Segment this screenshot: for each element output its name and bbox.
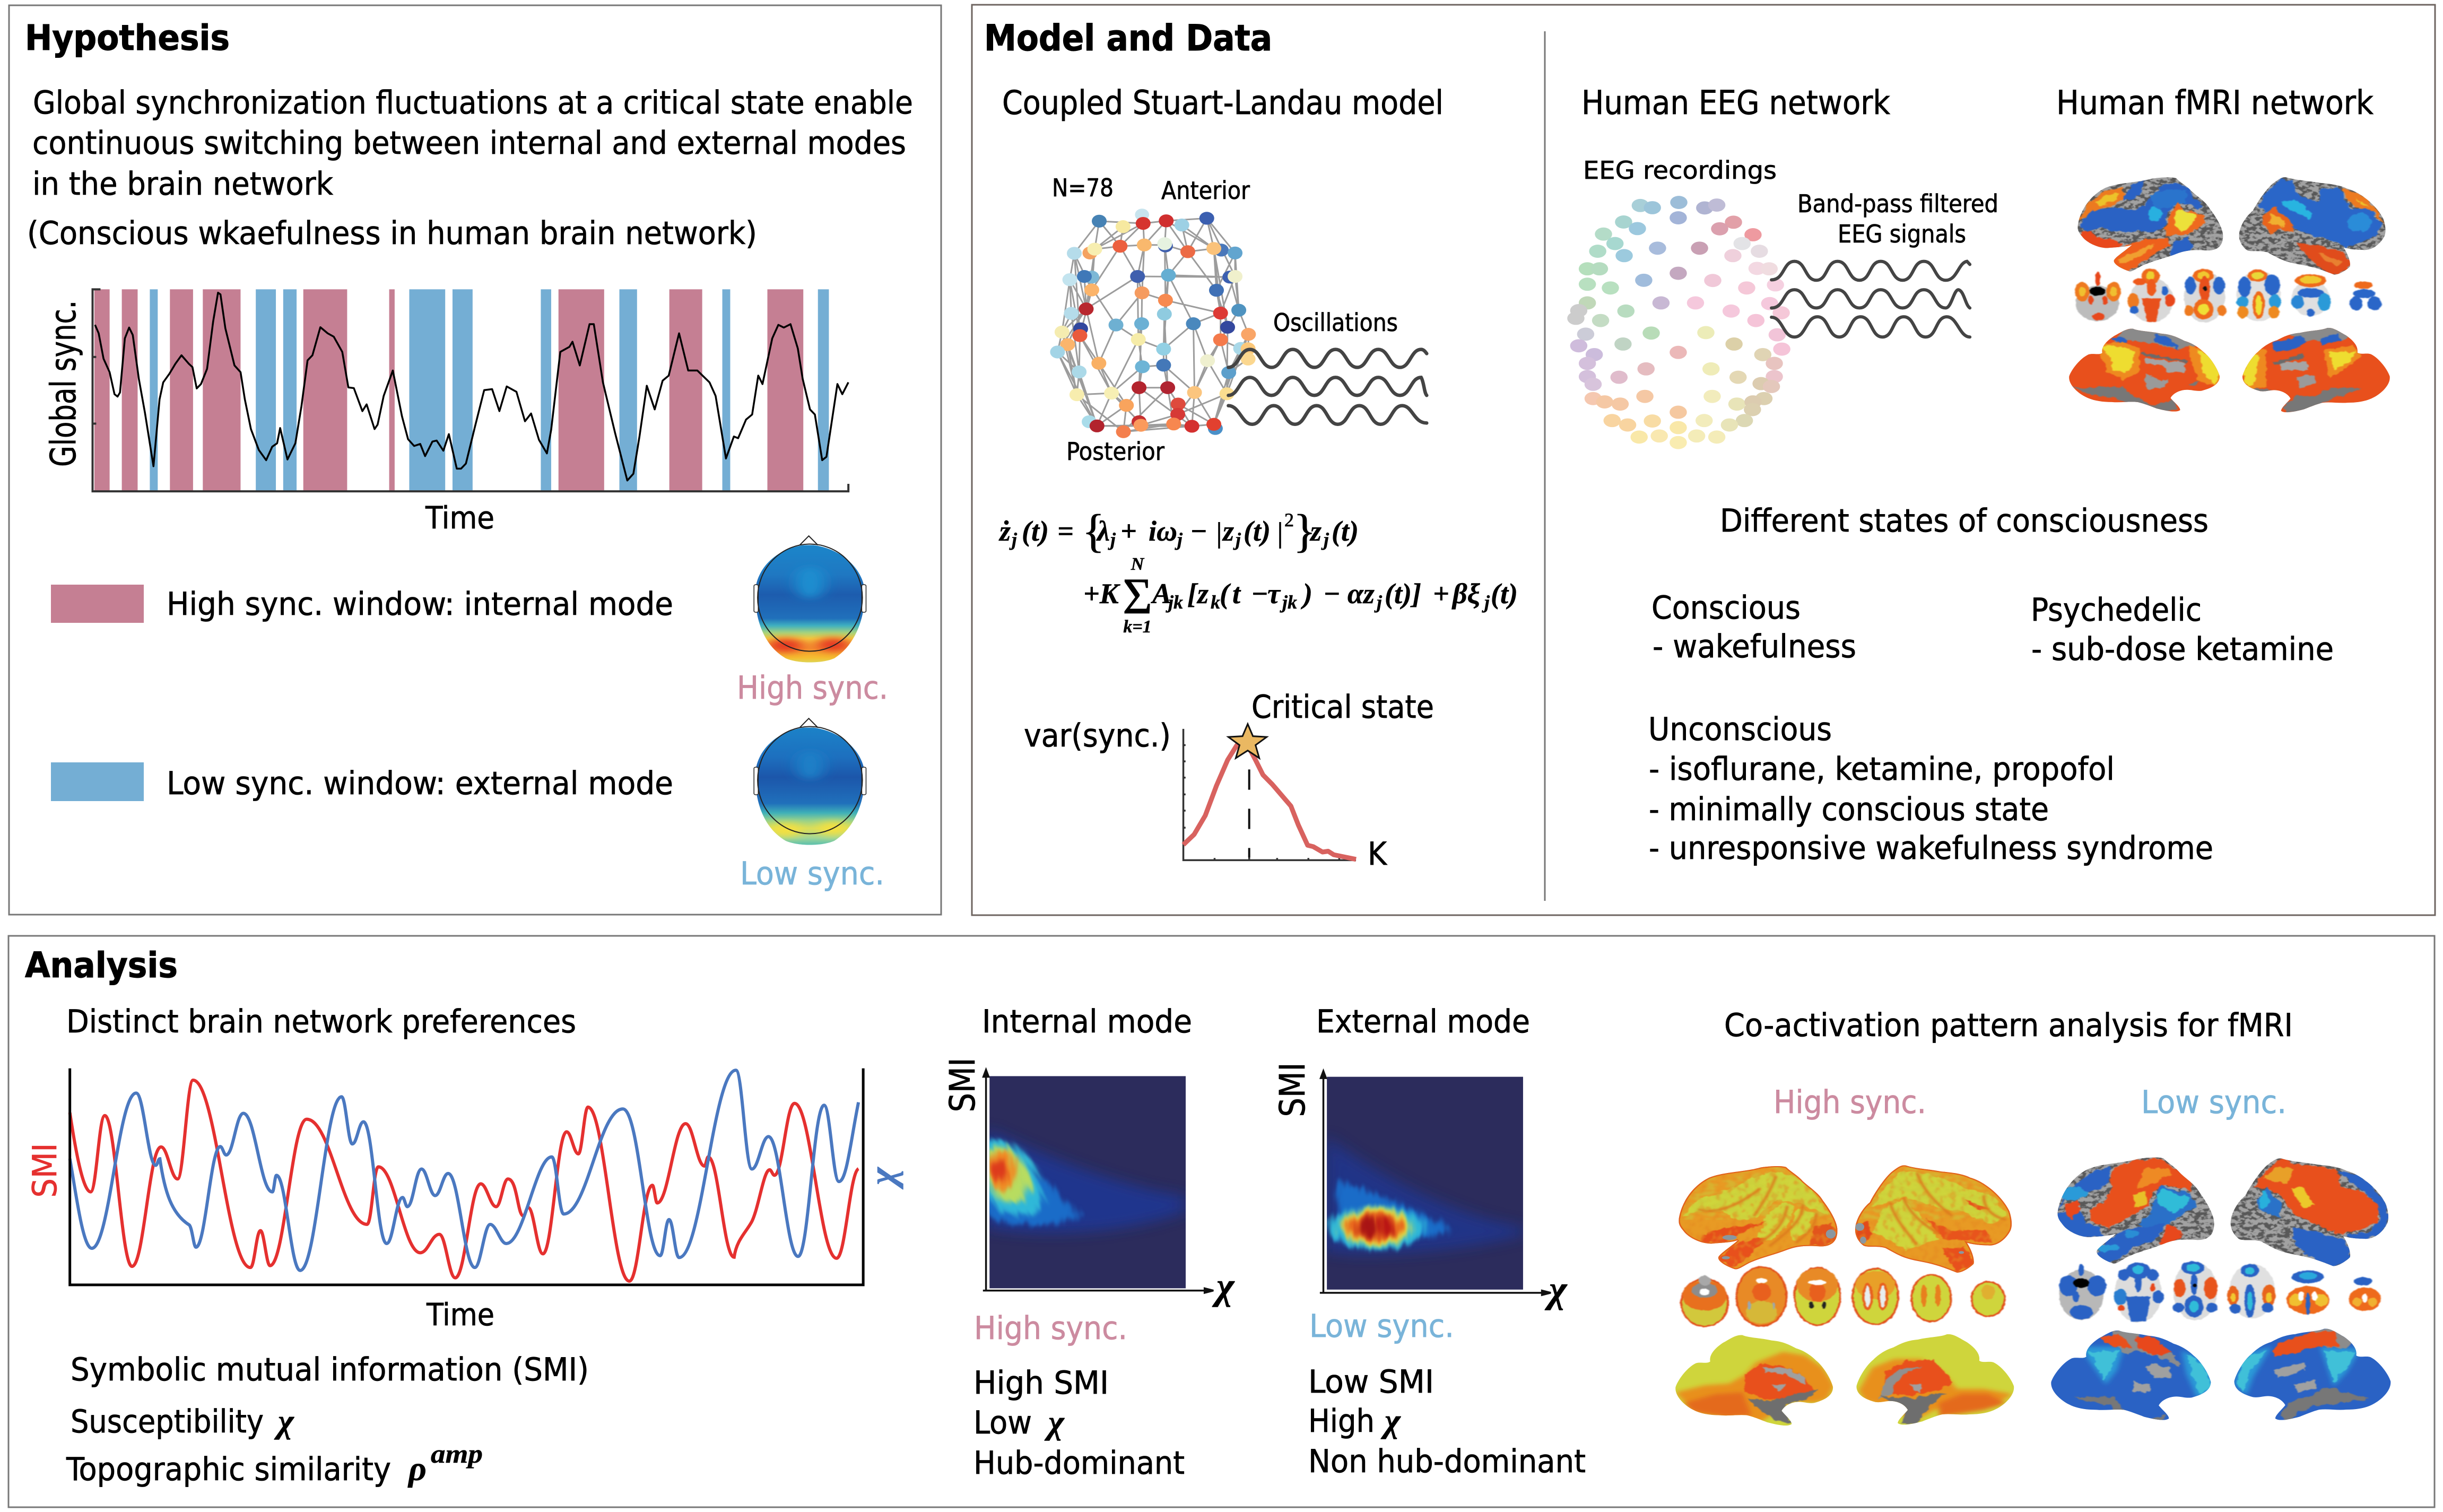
axis label: chi: χ [1212, 1265, 1235, 1307]
equation: Stuart-Landau model: z [1309, 515, 1322, 547]
label: Low sync.: Low sync. [740, 855, 884, 892]
heading: Co-activation pattern analysis for fMRI: Co-activation pattern analysis for fMRI [1724, 1007, 2293, 1044]
equation: Stuart-Landau model: (t) [1244, 515, 1271, 547]
chart: variance of synchrony vs coupling [1024, 689, 1434, 873]
brain: left medial [2048, 1327, 2218, 1426]
icon: EEG topography, high sync [749, 536, 871, 664]
equation: Stuart-Landau model: } [1293, 506, 1316, 557]
heading: External mode: External mode [1316, 1003, 1530, 1040]
axis label: SMI: SMI [25, 1143, 64, 1198]
equation: Stuart-Landau model: − [1190, 515, 1207, 547]
label: Band-pass filtered EEG signals: EEG signals [1838, 220, 1966, 248]
text block: internal mode properties: χ [1044, 1403, 1065, 1441]
heading: Coupled Stuart-Landau model: Coupled Stuart-Landau model [1002, 83, 1444, 122]
text block: unconscious states: - minimally conscious state [1649, 791, 2049, 828]
brain: left lateral [1675, 1163, 1841, 1273]
text block: external mode properties [1308, 1363, 1586, 1480]
label: Low sync. CAP: Low sync. [2141, 1084, 2286, 1121]
axis label: chi: χ [861, 1167, 903, 1190]
brain: axial slices [2075, 268, 2381, 323]
label: Critical state: Critical state [1251, 689, 1434, 726]
text block: unconscious states: - unresponsive wakefulness syndrome [1649, 830, 2213, 867]
text block: conscious states: Conscious [1651, 589, 1801, 627]
waves: band-pass filtered EEG [1771, 262, 1970, 337]
text block: metric definitions [66, 1351, 589, 1488]
equation: Stuart-Landau model: 2 [1284, 509, 1294, 531]
equation: Stuart-Landau model: j [1374, 592, 1383, 613]
equation: Stuart-Landau model: j [1233, 529, 1241, 550]
axis label: Time: Time [425, 500, 494, 536]
equation: Stuart-Landau model: iω [1149, 515, 1177, 547]
text block: unconscious states: Unconscious [1648, 711, 1832, 748]
text block: conscious states: - wakefulness [1653, 628, 1856, 665]
text block: metric definitions: χ [274, 1402, 294, 1440]
brain: axial slices [1681, 1267, 2005, 1326]
equation: Stuart-Landau model: k=1 [1123, 617, 1152, 637]
text block: internal mode properties: Hub-dominant [973, 1445, 1185, 1482]
text block: hypothesis statement: Global synchronization fluctuations at a critical state enable [33, 84, 913, 121]
equation: Stuart-Landau model: jk [1280, 592, 1297, 613]
legend: high sync window: High sync. window: internal mode [167, 586, 673, 623]
text block: conscious states [1651, 589, 1856, 665]
heading: Human fMRI network: Human fMRI network [2056, 83, 2374, 122]
equation: Stuart-Landau model: +K [1083, 578, 1121, 610]
equation: Stuart-Landau model: αz [1347, 578, 1375, 610]
text block: external mode properties: Non hub-dominant [1308, 1443, 1586, 1480]
text block: external mode properties: χ [1380, 1402, 1401, 1439]
equation: Stuart-Landau model: j [1108, 529, 1116, 550]
brain: right lateral [2227, 1155, 2394, 1270]
heading: Different states of consciousness: Different states of consciousness [1720, 502, 2209, 540]
equation: Stuart-Landau model: Σ [1123, 568, 1152, 624]
icon: EEG topography, low sync [749, 718, 871, 846]
label: High sync. CAP: High sync. [1773, 1084, 1926, 1121]
label: Band-pass filtered EEG signals: Band-pass filtered [1797, 189, 1998, 218]
chart: global synchronization time series [43, 289, 848, 536]
equation: Stuart-Landau model: + [1120, 515, 1137, 547]
panel: Hypothesis [9, 5, 941, 915]
diagram: oscillator network [1050, 173, 1427, 466]
equation: Stuart-Landau model: j [1482, 592, 1490, 613]
brain maps: human fMRI network [2065, 173, 2394, 417]
equation: Stuart-Landau model: λ [1096, 515, 1110, 547]
label: K: K [1368, 836, 1388, 873]
diagram: EEG recordings [1567, 156, 1998, 449]
equation: Stuart-Landau model: + [1433, 578, 1449, 610]
equation: Stuart-Landau model: t [1232, 578, 1241, 610]
label: Oscillations: Oscillations [1273, 308, 1398, 337]
equation: Stuart-Landau model: { [1082, 506, 1105, 557]
equation: Stuart-Landau model: z [1222, 515, 1234, 547]
text block: psychedelic states: Psychedelic [2031, 592, 2202, 629]
text block: hypothesis statement: in the brain network [32, 166, 334, 203]
brain: right lateral [1852, 1162, 2015, 1274]
equation: Stuart-Landau model: = [1057, 515, 1074, 547]
label: High sync. internal: High sync. [974, 1310, 1127, 1347]
text block: hypothesis statement: continuous switching between internal and external modes [32, 125, 906, 162]
text block: psychedelic states: - sub-dose ketamine [2031, 631, 2334, 668]
brain maps: low sync co-activation pattern [2048, 1155, 2396, 1426]
text block: internal mode properties [973, 1365, 1185, 1482]
chart: SMI and susceptibility time series [25, 1068, 903, 1333]
equation: Stuart-Landau model: τ [1267, 578, 1281, 610]
text block: metric definitions: Topographic similarity [66, 1451, 391, 1488]
heatmap: external mode [1272, 1062, 1568, 1310]
brain: right medial [2242, 328, 2390, 413]
brain: right medial [2231, 1325, 2396, 1426]
equation: Stuart-Landau model: ) [1300, 578, 1312, 610]
text block: external mode properties: High [1308, 1403, 1375, 1440]
brain: axial slices [2059, 1262, 2381, 1323]
brain: right lateral [2239, 177, 2386, 275]
diagram: EEG recordings: EEG recordings [1583, 156, 1777, 185]
equation: Stuart-Landau model: − [1323, 578, 1341, 610]
brain: left medial [1673, 1333, 1839, 1428]
axis label: Time: Time [426, 1297, 494, 1333]
label: Posterior: Posterior [1066, 437, 1165, 466]
text block: metric definitions: ρ [407, 1449, 427, 1488]
equation: Stuart-Landau model: j [1175, 529, 1183, 550]
label: High sync.: High sync. [737, 670, 888, 707]
label: Band-pass filtered EEG signals [1797, 189, 1998, 248]
equation: Stuart-Landau model: ż [998, 515, 1011, 547]
text block: internal mode properties: High SMI [973, 1365, 1109, 1402]
heading: Internal mode: Internal mode [982, 1003, 1192, 1040]
equation: Stuart-Landau model: j [1009, 529, 1018, 550]
equation: Stuart-Landau model: (t)] [1385, 578, 1421, 610]
heatmap: internal mode [942, 1058, 1235, 1307]
panel: Analysis [8, 936, 2435, 1507]
equation: Stuart-Landau model: j [1321, 529, 1329, 550]
text block: metric definitions: Susceptibility [71, 1403, 264, 1440]
axis label: SMI: SMI [1272, 1062, 1313, 1117]
equation: Stuart-Landau model: k [1211, 592, 1220, 613]
label: var(sync.): var(sync.) [1024, 717, 1171, 754]
waves: model oscillations [1228, 350, 1427, 424]
equation: Stuart-Landau model: − [1251, 578, 1268, 610]
equation: Stuart-Landau model: N [1131, 554, 1145, 574]
text block: metric definitions: Symbolic mutual information (SMI) [71, 1351, 589, 1388]
brain maps: high sync co-activation pattern [1673, 1162, 2017, 1428]
icon: critical state star [1228, 724, 1267, 758]
heading: Human EEG network: Human EEG network [1581, 83, 1891, 122]
text block: metric definitions: amp [431, 1439, 483, 1468]
equation: Stuart-Landau model: (t) [1332, 515, 1359, 547]
text block: unconscious states [1648, 711, 2213, 867]
brain: left lateral [2052, 1155, 2220, 1266]
panel: Model and Data [972, 5, 2435, 915]
heading: Distinct brain network preferences: Distinct brain network preferences [66, 1003, 576, 1040]
heading: Hypothesis: Hypothesis [25, 18, 230, 58]
equation: Stuart-Landau model: βξ [1451, 578, 1480, 610]
brain: left medial [2069, 329, 2220, 412]
axis label: SMI: SMI [942, 1058, 983, 1112]
equation: Stuart-Landau model: A [1151, 578, 1171, 610]
axis label: Global sync.: Global sync. [43, 300, 84, 467]
equation: Stuart-Landau model: jk [1166, 592, 1183, 613]
text block: hypothesis statement [27, 84, 913, 252]
equation: Stuart-Landau model: [ [1187, 578, 1198, 610]
equation: Stuart-Landau model [998, 506, 1518, 637]
legend: low sync window: Low sync. window: external mode [167, 765, 673, 802]
heading: Analysis: Analysis [25, 945, 178, 986]
equation: Stuart-Landau model: z [1196, 578, 1209, 610]
equation: Stuart-Landau model: (t) [1491, 578, 1518, 610]
heading: Model and Data: Model and Data [984, 18, 1272, 59]
equation: Stuart-Landau model: (t) [1022, 515, 1049, 547]
label: Anterior: Anterior [1161, 176, 1250, 205]
text block: internal mode properties: Low [973, 1404, 1032, 1441]
axis label: chi: χ [1544, 1268, 1568, 1310]
label: N=78: N=78 [1052, 173, 1114, 202]
text block: external mode properties: Low SMI [1308, 1363, 1434, 1401]
label: Low sync. external: Low sync. [1309, 1308, 1454, 1345]
equation: Stuart-Landau model: ( [1220, 578, 1231, 610]
brain: right medial [1854, 1333, 2017, 1428]
text block: unconscious states: - isoflurane, ketamine, propofol [1649, 751, 2115, 788]
brain: left lateral [2077, 177, 2223, 272]
text block: psychedelic states [2031, 592, 2334, 668]
text block: hypothesis statement: (Conscious wkaefulness in human brain network) [27, 215, 757, 252]
